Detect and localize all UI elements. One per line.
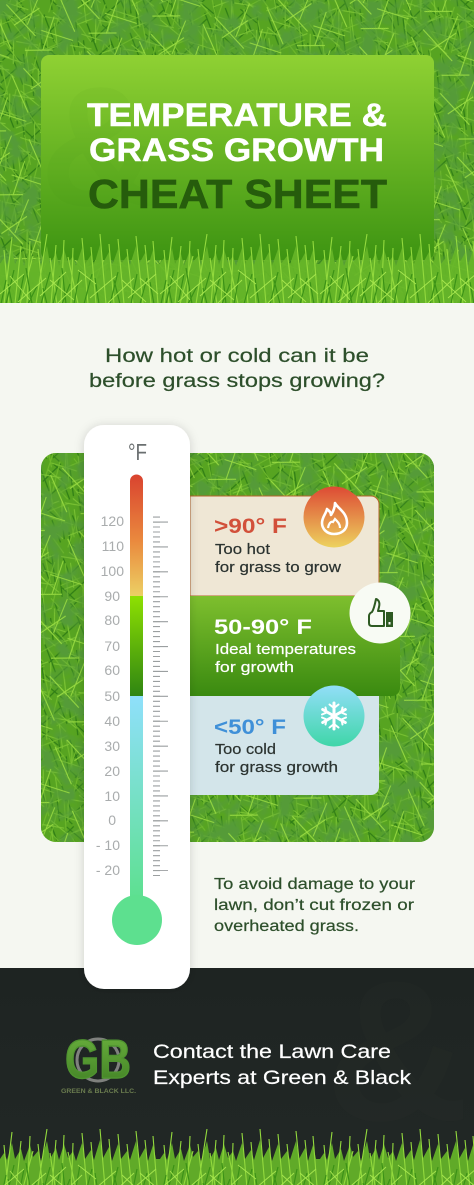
title line 2: GRASS GROWTH — [89, 132, 384, 168]
hot description: for grass to grow — [215, 560, 342, 576]
grass panel behind temperature cards — [41, 453, 434, 842]
scale numbers: 10 — [104, 788, 120, 804]
hot range value: >90° F — [214, 515, 287, 538]
scale numbers: 40 — [104, 713, 120, 729]
hot description: Too hot — [215, 542, 270, 558]
ideal description: for growth — [215, 660, 294, 676]
minor ticks — [153, 516, 160, 876]
logo ring — [77, 1039, 119, 1081]
contact text — [153, 1041, 411, 1089]
question line 2: before grass stops growing? — [89, 371, 385, 392]
scale numbers: 30 — [104, 738, 120, 754]
cold description: for grass growth — [215, 760, 338, 776]
scale numbers: 90 — [104, 588, 120, 604]
advice note: overheated grass. — [214, 918, 359, 935]
ideal description — [215, 642, 356, 676]
grass fringe over panel — [0, 234, 474, 304]
scale numbers: 120 — [101, 513, 124, 529]
advice note — [214, 876, 415, 935]
title line 1: TEMPERATURE & — [87, 97, 387, 133]
contact text: Contact the Lawn Care — [153, 1041, 391, 1063]
advice note: To avoid damage to your — [214, 876, 415, 893]
question line 1: How hot or cold can it be — [105, 346, 369, 367]
cold tube section — [130, 696, 143, 901]
ideal range value: 50-90° F — [214, 616, 312, 639]
scale numbers: 50 — [104, 688, 120, 704]
card: too hot — [190, 486, 379, 596]
card: too cold — [190, 696, 379, 795]
thermometer — [84, 425, 190, 989]
scale numbers: - 10 — [96, 837, 120, 853]
scale numbers: 70 — [104, 638, 120, 654]
footer band — [0, 968, 474, 1185]
unit label: °F — [128, 439, 147, 465]
grass background — [0, 0, 474, 303]
scale numbers: 80 — [104, 612, 120, 628]
footer grass — [0, 1129, 474, 1185]
icon: snowflake — [304, 686, 364, 746]
logo caption: GREEN & BLACK LLC. — [61, 1089, 136, 1095]
scale numbers: 100 — [101, 563, 124, 579]
title text — [87, 103, 387, 209]
title line 3: CHEAT SHEET — [88, 171, 387, 217]
card: ideal temperatures — [190, 582, 410, 696]
cold description — [215, 742, 338, 776]
major ticks — [153, 522, 168, 871]
ideal tube section — [130, 596, 143, 696]
ideal description: Ideal temperatures — [215, 642, 356, 658]
title panel — [40, 52, 434, 260]
hot tube section — [130, 474, 143, 596]
scale numbers: 20 — [104, 763, 120, 779]
scale numbers — [96, 513, 124, 878]
cold range value: <50° F — [214, 716, 286, 739]
scale numbers: 0 — [108, 812, 116, 828]
subheading question — [89, 346, 385, 392]
header: grass banner — [0, 0, 474, 304]
logo letters: GB — [65, 1028, 131, 1090]
scale numbers: 60 — [104, 662, 120, 678]
contact text: Experts at Green & Black — [153, 1067, 411, 1089]
watermark ampersand: & — [40, 52, 163, 242]
bulb — [112, 895, 162, 945]
scale numbers: 110 — [102, 538, 124, 554]
logo: Green & Black — [61, 1028, 136, 1095]
thermometer body — [84, 425, 190, 989]
cold description: Too cold — [215, 742, 276, 758]
icon: flame — [304, 486, 364, 548]
scale numbers: - 20 — [96, 862, 120, 878]
icon: thumbs up — [350, 582, 410, 644]
advice note: lawn, don’t cut frozen or — [214, 897, 414, 914]
hot description — [215, 542, 342, 576]
footer watermark ampersand: & — [325, 940, 469, 1163]
